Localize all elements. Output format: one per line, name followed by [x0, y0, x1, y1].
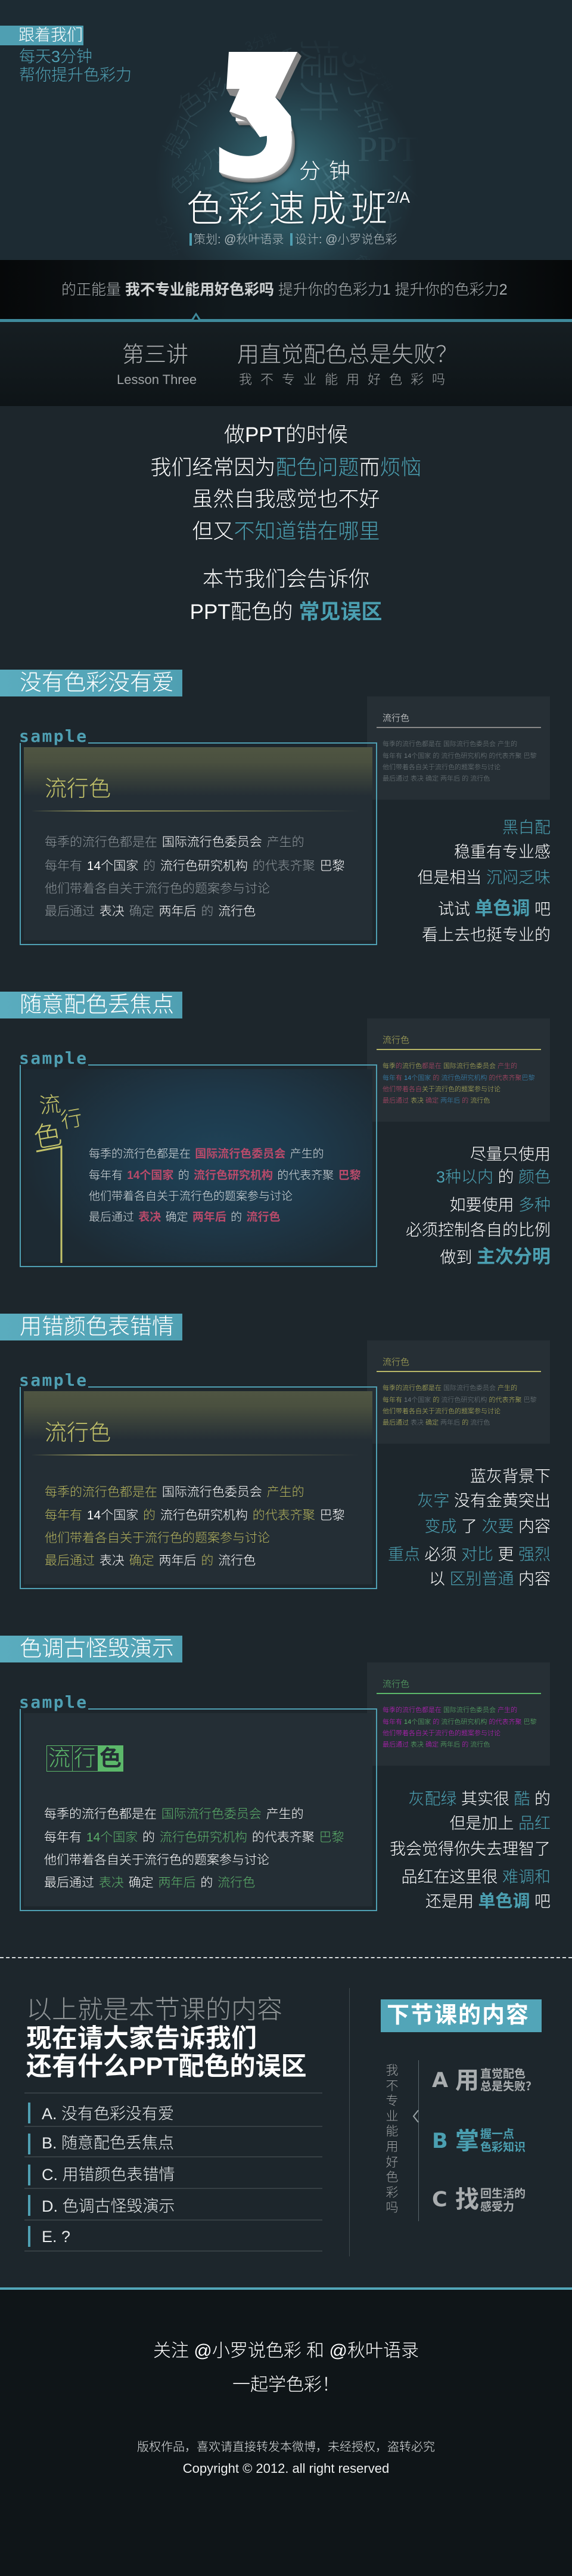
- slide body: 每季的流行色都是在 国际流行色委员会 产生的: [89, 1148, 324, 1160]
- credits: [189, 233, 397, 246]
- word cloud decoration: 色彩: [189, 172, 284, 253]
- next lesson vertical title: 用: [386, 2140, 398, 2154]
- sample slide: [24, 1069, 372, 1262]
- small original slide: 每季的流行色都是在 国际流行色委员会 产生的: [383, 741, 517, 748]
- word cloud decoration: [162, 43, 405, 260]
- word cloud decoration: 提升: [160, 110, 204, 162]
- summary list: E. ?: [42, 2228, 70, 2246]
- word cloud decoration: 色彩: [350, 251, 381, 287]
- next lesson vertical title: 能: [386, 2125, 398, 2138]
- intro text: [150, 423, 422, 624]
- small original slide: 他们带着各自关于流行色的题案参与讨论: [383, 1408, 500, 1415]
- summary list: [24, 2092, 322, 2252]
- slide heading boxes: 行: [74, 1746, 96, 1770]
- panel: section 4: 最后通过 表决 确定 两年后 的 流行色: [44, 1876, 255, 1890]
- slide heading boxes: 色: [100, 1746, 122, 1770]
- sample slide: [24, 1713, 372, 1906]
- slide body: 每季的流行色都是在 国际流行色委员会 产生的: [45, 835, 304, 849]
- panel: section 4: 还是用 单色调 吧: [425, 1892, 551, 1911]
- next item B: B: [432, 2129, 448, 2153]
- next lesson vertical title: [386, 2064, 398, 2215]
- header background with glow: [0, 0, 572, 322]
- panel: section 4: 每年有 14个国家 的 流行色研究机构 的代表齐聚 巴黎: [44, 1831, 344, 1844]
- panel: section 4: 他们带着各自关于流行色的题案参与讨论: [44, 1853, 269, 1867]
- small original slide: 他们带着各自关于流行色的题案参与讨论: [383, 1730, 500, 1737]
- title superscript: 2/A: [387, 188, 410, 206]
- big 3 logo: 3: [210, 14, 302, 217]
- small original slide: [367, 1340, 550, 1444]
- dashed separator: [0, 1957, 572, 1958]
- panel: section 2: [0, 992, 551, 1267]
- summary list: B. 随意配色丢焦点: [42, 2134, 174, 2152]
- next item C: C: [432, 2188, 447, 2212]
- summary list: A. 没有色彩没有爱: [42, 2105, 174, 2123]
- next lesson vertical title: 好: [386, 2156, 398, 2169]
- section heading: 色调古怪毁演示: [20, 1636, 174, 1661]
- intro text: 我们经常因为配色问题而烦恼: [150, 456, 422, 479]
- small original slide: 每季的流行色都是在 国际流行色委员会 产生的: [383, 1707, 517, 1714]
- panel: section 1: 试试 单色调 吧: [438, 898, 551, 919]
- small original slide: 最后通过 表决 确定 两年后 的 流行色: [383, 1419, 490, 1426]
- small original slide: 流行色: [383, 713, 409, 723]
- intro text: PPT配色的 常见误区: [190, 600, 382, 624]
- slide divider: [31, 1454, 359, 1456]
- slide logo: 流: [38, 1091, 62, 1118]
- word cloud decoration: 设计: [352, 165, 431, 248]
- section heading: 随意配色丢焦点: [20, 992, 174, 1017]
- small original slide: 最后通过 表决 确定 两年后 的 流行色: [383, 1097, 490, 1104]
- next lesson vertical title: 专: [386, 2094, 398, 2108]
- next item A: 用: [455, 2067, 479, 2094]
- next item C: 回生活的: [480, 2188, 526, 2200]
- panel: section 2: 必须控制各自的比例: [406, 1221, 551, 1239]
- small original slide: 每年有 14个国家 的 流行色研究机构 的代表齐聚 巴黎: [383, 753, 537, 760]
- sample slide: [24, 1391, 372, 1584]
- panel: section 1: 他们带着各自关于流行色的题案参与讨论: [45, 882, 270, 896]
- big 3 logo: [219, 52, 301, 185]
- panel: section 1: 稳重有专业感: [454, 843, 551, 861]
- next lesson vertical title: 业: [386, 2110, 398, 2123]
- title: 色彩速成班: [186, 188, 392, 229]
- word cloud decoration: 3分钟: [332, 44, 393, 139]
- intro text: 本节我们会告诉你: [203, 568, 369, 591]
- small original slide: 最后通过 表决 确定 两年后 的 流行色: [383, 775, 490, 782]
- section heading: 用错颜色表错情: [20, 1314, 174, 1339]
- nav text: 的正能量 我不专业能用好色彩吗 提升你的色彩力1 提升你的色彩力2: [61, 281, 508, 298]
- next item A: 总是失败？: [480, 2080, 537, 2093]
- lesson english: Lesson Three: [117, 372, 197, 387]
- panel: section 1: 每年有 14个国家 的 流行色研究机构 的代表齐聚 巴黎: [45, 859, 345, 873]
- word cloud decoration: 3分钟: [151, 213, 183, 260]
- word cloud decoration: 色彩: [166, 253, 220, 313]
- slide heading: 流行色: [45, 1420, 111, 1445]
- teal rule: [0, 319, 572, 322]
- word cloud decoration: 3分钟: [368, 58, 397, 95]
- intro text: 虽然自我感觉也不好: [192, 488, 380, 511]
- word cloud decoration: PPT: [358, 129, 419, 169]
- panel: section 1: 看上去也挺专业的: [422, 926, 551, 944]
- panel: section 1: 但是相当 沉闷乏味: [417, 869, 551, 887]
- panel: section 2: 如要使用 多种: [449, 1196, 551, 1214]
- sample label: sample: [19, 726, 88, 746]
- small original slide: [367, 1662, 550, 1766]
- next item C: 找: [455, 2187, 479, 2213]
- next lesson tag: 下节课的内容: [387, 2003, 530, 2028]
- lesson subtitle: 我不专业能用好色彩吗: [239, 372, 453, 387]
- slide logo: 行: [59, 1105, 84, 1133]
- panel: section 4: 但是加上 品红: [449, 1815, 551, 1832]
- commentary: 蓝灰背景下: [470, 1467, 551, 1485]
- slogan text: 每天3分钟 帮你提升色彩力: [19, 48, 132, 84]
- panel: section 4: 品红在这里很 难调和: [401, 1868, 551, 1886]
- bracket with chevron: [412, 2060, 419, 2221]
- credits: 设计: @小罗说色彩: [295, 233, 397, 246]
- footer: Copyright © 2012. all right reserved: [183, 2461, 389, 2476]
- tag: follow us: 跟着我们: [18, 26, 83, 44]
- small original slide: 每季的流行色都是在 国际流行色委员会 产生的: [383, 1385, 517, 1392]
- word cloud decoration: 3分钟: [243, 29, 279, 54]
- intro text: 但又不知道错在哪里: [192, 520, 380, 543]
- small original slide: 每年有 14个国家 的 流行色研究机构 的代表齐聚巴黎: [383, 1075, 535, 1082]
- small original slide: 每年有 14个国家 的 流行色研究机构 的代表齐聚 巴黎: [383, 1397, 537, 1404]
- lesson number: 第三讲: [122, 342, 188, 367]
- small original slide: [367, 1018, 550, 1122]
- word cloud decoration: 设计: [331, 253, 390, 305]
- next item B: 握一点: [480, 2128, 514, 2141]
- next lesson vertical title: 我: [386, 2064, 398, 2077]
- panel: section 2: 最后通过 表决 确定 两年后 的 流行色: [89, 1211, 280, 1224]
- slide body: 每季的流行色都是在 国际流行色委员会 产生的: [45, 1485, 304, 1499]
- small original slide: 流行色: [383, 1035, 409, 1045]
- sample slide: [24, 747, 372, 940]
- panel: section 4: [0, 1636, 551, 1911]
- next item C: [432, 2187, 526, 2213]
- commentary: 尽量只使用: [470, 1145, 551, 1163]
- slide logo: [32, 1091, 84, 1263]
- small original slide: 流行色: [383, 1357, 409, 1367]
- credits: 策划: @秋叶语录: [194, 233, 284, 246]
- summary list: D. 色调古怪毁演示: [42, 2197, 175, 2215]
- word cloud decoration: 每天: [312, 157, 387, 229]
- small original slide: 流行色: [383, 1679, 409, 1689]
- summary list: C. 用错颜色表错情: [42, 2166, 175, 2184]
- word cloud decoration: 色彩: [301, 148, 378, 239]
- next lesson tag: [381, 1999, 542, 2032]
- sample label: sample: [19, 1370, 88, 1390]
- next item A: A: [432, 2069, 448, 2092]
- small original slide: 每年有 14个国家 的 流行色研究机构 的代表齐聚 巴黎: [383, 1719, 537, 1726]
- slide logo: 色: [32, 1118, 64, 1154]
- commentary: 灰配绿 其实很 酷 的: [408, 1790, 551, 1808]
- vertical divider: [349, 1988, 350, 2256]
- word cloud decoration: 色彩力: [166, 143, 227, 199]
- next item B: 掌: [455, 2128, 479, 2154]
- nav band: [0, 260, 572, 319]
- small original slide: 最后通过 表决 确定 两年后 的 流行色: [383, 1741, 490, 1748]
- small original slide: 他们带着各自关于流行色的题案参与讨论: [383, 1086, 500, 1093]
- slide heading boxes: [46, 1745, 123, 1772]
- lesson band: [0, 322, 572, 406]
- next item A: [432, 2067, 537, 2094]
- sample label: sample: [19, 1048, 88, 1068]
- panel: section 1: 最后通过 表决 确定 两年后 的 流行色: [45, 905, 256, 918]
- next lesson vertical title: 色: [386, 2171, 398, 2184]
- panel: section 3: 重点 必须 对比 更 强烈: [388, 1546, 551, 1563]
- panel: section 3: 灰字 没有金黄突出: [417, 1492, 551, 1510]
- panel: section 3: 最后通过 表决 确定 两年后 的 流行色: [45, 1554, 256, 1568]
- panel: section 2: 做到 主次分明: [440, 1246, 551, 1267]
- panel: section 3: 变成 了 次要 内容: [424, 1518, 551, 1535]
- small original slide: [367, 696, 550, 800]
- lesson title: 用直觉配色总是失败？: [237, 342, 458, 367]
- summary heading: 以上就是本节课的内容 现在请大家告诉我们 还有什么PPT配色的误区: [26, 1996, 307, 2081]
- next lesson vertical title: 不: [386, 2079, 398, 2093]
- panel: section 4: 我会觉得你失去理智了: [390, 1840, 551, 1858]
- next item B: [432, 2128, 526, 2154]
- footer: [0, 2287, 572, 2576]
- word cloud decoration: 色彩: [171, 68, 234, 125]
- panel: section 1: [0, 670, 551, 945]
- next item C: 感受力: [480, 2201, 514, 2213]
- panel: section 2: 他们带着各自关于流行色的题案参与讨论: [89, 1190, 293, 1203]
- footer: 一起学色彩！: [232, 2375, 340, 2395]
- small original slide: 每季的流行色都是在 国际流行色委员会 产生的: [383, 1063, 517, 1070]
- panel: section 3: [0, 1314, 551, 1589]
- slide heading boxes: 流: [48, 1746, 70, 1770]
- panel: section 2: 3种以内 的 颜色: [436, 1168, 551, 1186]
- section heading: 没有色彩没有爱: [20, 670, 174, 695]
- intro text: 做PPT的时候: [224, 423, 348, 447]
- commentary: 黑白配: [502, 819, 551, 837]
- next item A: 直觉配色: [480, 2068, 526, 2080]
- word cloud decoration: 提升: [295, 39, 341, 122]
- follow text: 关注 @小罗说色彩 和 @秋叶语录: [153, 2341, 419, 2361]
- panel: section 2: 每年有 14个国家 的 流行色研究机构 的代表齐聚 巴黎: [89, 1169, 361, 1182]
- subtitle: minutes: 分钟: [299, 159, 359, 183]
- panel: section 3: 以 区别普通 内容: [429, 1570, 551, 1588]
- slide divider: [31, 810, 359, 812]
- next item B: 色彩知识: [480, 2141, 526, 2154]
- next lesson vertical title: 吗: [386, 2201, 398, 2215]
- panel: section 3: 他们带着各自关于流行色的题案参与讨论: [45, 1531, 270, 1545]
- slide body: 每季的流行色都是在 国际流行色委员会 产生的: [44, 1807, 304, 1821]
- panel: section 3: 每年有 14个国家 的 流行色研究机构 的代表齐聚 巴黎: [45, 1509, 345, 1522]
- nav arrow marker: [192, 312, 200, 320]
- sample label: sample: [19, 1692, 88, 1712]
- small original slide: 他们带着各自关于流行色的题案参与讨论: [383, 764, 500, 771]
- slide heading: 流行色: [45, 776, 111, 801]
- next lesson vertical title: 彩: [386, 2186, 398, 2200]
- word cloud decoration: PPT: [260, 44, 297, 73]
- copyright: 版权作品，喜欢请直接转发本微博，未经授权，盗转必究: [137, 2441, 435, 2454]
- word cloud decoration: 提升: [195, 262, 271, 321]
